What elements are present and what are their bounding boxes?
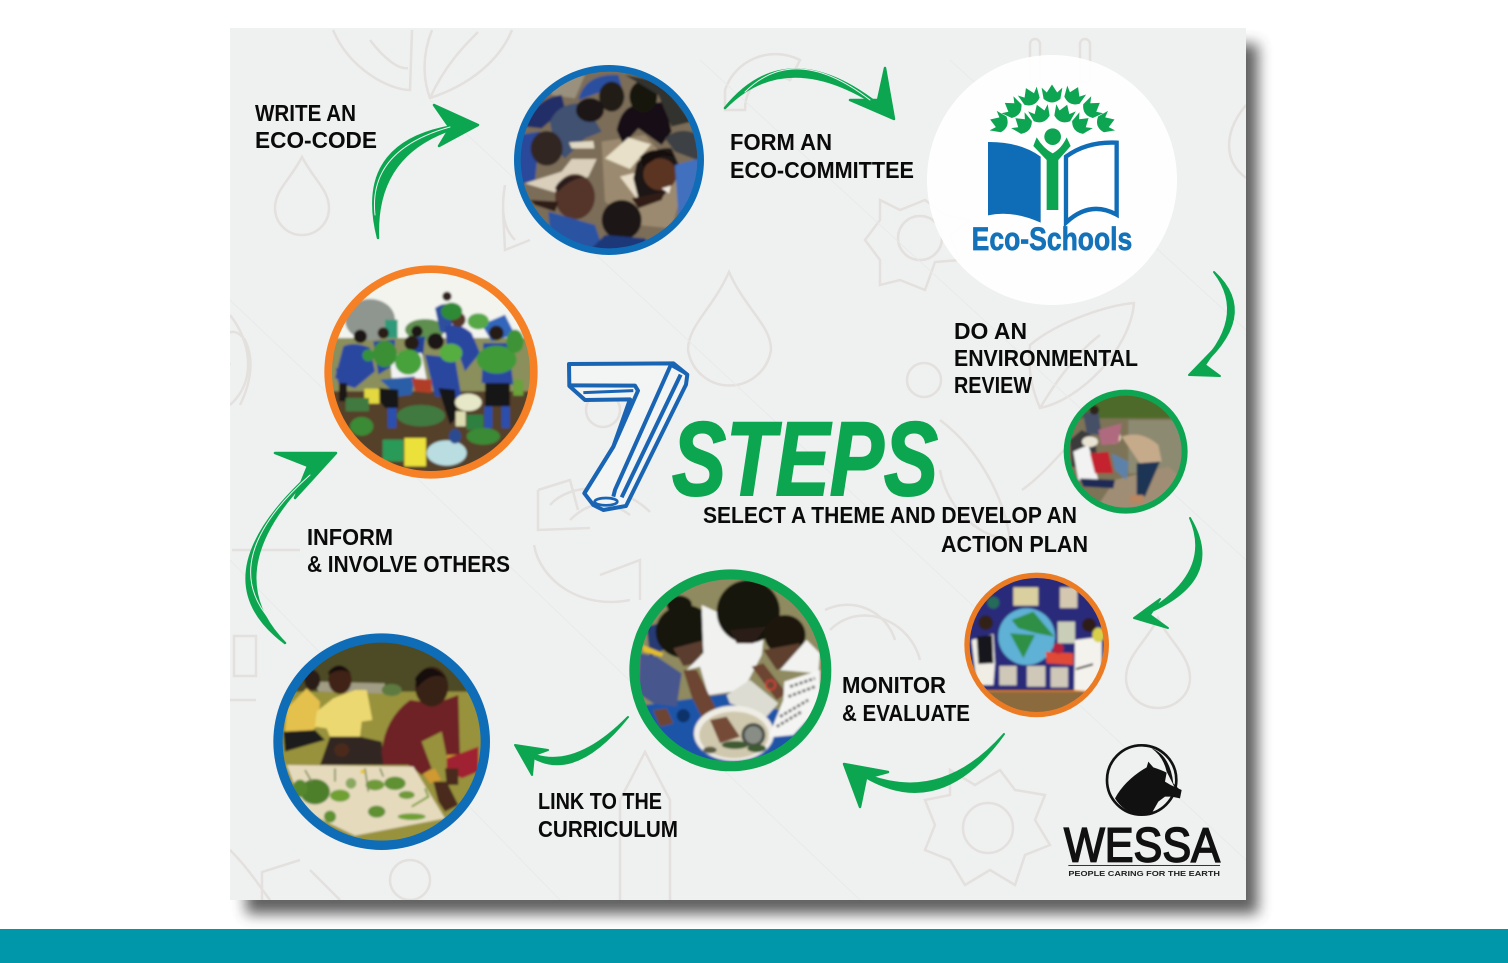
photo: pupils writing on floor: [514, 65, 705, 258]
step label: form an eco-committee: ECO-COMMITTEE: [730, 157, 914, 183]
step label: inform and involve: & INVOLVE OTHERS: [307, 551, 510, 577]
decorative background pattern: [224, 30, 1246, 900]
teal footer bar: [0, 929, 1508, 963]
arrow: photo to logo: [725, 68, 894, 119]
step label: form an eco-committee: FORM AN: [730, 129, 832, 155]
step label: environmental review: ENVIRONMENTAL: [954, 345, 1138, 371]
step label: select a theme: [703, 502, 1088, 557]
step label: select a theme: ACTION PLAN: [941, 531, 1088, 557]
step label: monitor and evaluate: MONITOR: [842, 672, 946, 698]
arrow: review to theme: [1134, 518, 1201, 628]
tree leaves: [987, 83, 1118, 138]
photo: children with magnifying glass: [629, 569, 831, 771]
heading STEPS: STEPS: [672, 401, 938, 518]
large numeral 7: [569, 363, 687, 510]
white logo disc: [927, 55, 1177, 305]
antelope emblem: [1107, 745, 1182, 815]
photo: river environmental review: [1064, 390, 1188, 514]
left book page: [988, 142, 1041, 223]
WESSA logo: [1064, 745, 1221, 878]
step label: write an eco-code: ECO-CODE: [255, 127, 377, 153]
tagline rule: [1068, 864, 1220, 867]
arrow: monitor to curriculum: [515, 717, 628, 775]
photo: children with leaf collage: [273, 633, 490, 850]
arrow: theme to monitor: [844, 734, 1004, 807]
step label: write an eco-code: [255, 100, 377, 153]
figure: [1033, 137, 1071, 210]
logo wordmark: Eco-Schools: [972, 220, 1132, 257]
step label: inform and involve: INFORM: [307, 524, 393, 550]
WESSA wordmark: WESSA: [1064, 819, 1220, 873]
step label: form an eco-committee: [730, 129, 914, 183]
card panel: [230, 28, 1246, 900]
photo: map display board: [964, 573, 1112, 718]
step label: link to the curriculum: [538, 788, 678, 842]
arrow: code to committee photo: [373, 105, 478, 238]
step label: monitor and evaluate: [842, 672, 970, 726]
card shadow: [246, 44, 1258, 914]
step label: link to the curriculum: LINK TO THE: [538, 788, 662, 814]
step label: inform and involve: [307, 524, 510, 577]
tagline: PEOPLE CARING FOR THE EARTH: [1068, 869, 1221, 878]
step label: select a theme: SELECT A THEME AND DEVELOP AN: [703, 502, 1077, 528]
step label: environmental review: DO AN: [954, 318, 1027, 344]
step label: environmental review: REVIEW: [954, 372, 1032, 398]
Eco-Schools logo: [972, 83, 1132, 257]
step label: environmental review: [954, 318, 1138, 398]
right book page: [1066, 143, 1117, 223]
step label: link to the curriculum: CURRICULUM: [538, 816, 678, 842]
photo: pupils with vegetables: [324, 265, 538, 481]
arrow: logo to review: [1189, 272, 1234, 376]
faint diagonal texture: [688, 84, 1069, 398]
step label: write an eco-code: WRITE AN: [255, 100, 356, 126]
step label: monitor and evaluate: & EVALUATE: [842, 700, 970, 726]
arrow: curriculum to inform: [247, 453, 336, 643]
